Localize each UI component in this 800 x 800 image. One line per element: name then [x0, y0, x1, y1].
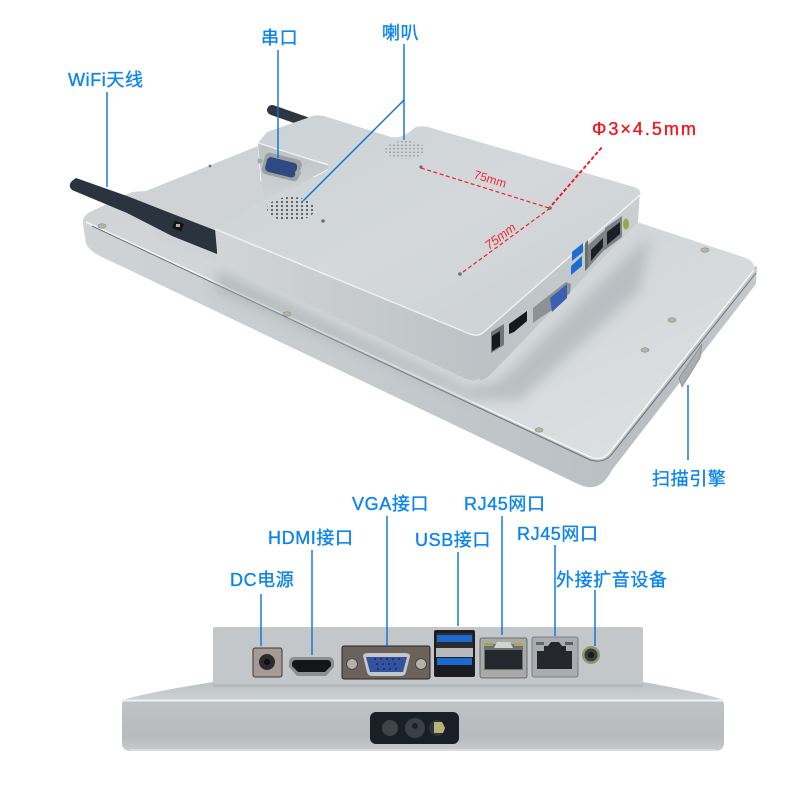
front edge [122, 699, 724, 751]
label: hole spec: Φ3×4.5mm [592, 119, 698, 139]
label: RJ45 port 1: RJ45网口 [464, 494, 546, 514]
back enclosure lower level [131, 146, 262, 262]
shadow under enclosure [215, 235, 650, 400]
speaker grille lower [267, 197, 315, 221]
screws on plate [98, 224, 709, 432]
side ports [491, 216, 629, 353]
DC jack [253, 648, 282, 677]
speaker grille upper [385, 141, 425, 159]
label: USB: USB接口 [415, 530, 491, 550]
75mm dimension lines: 75mm [482, 220, 519, 252]
VGA port [342, 646, 430, 679]
enclosure right face [477, 192, 640, 380]
device: port view [122, 627, 724, 751]
75mm dimension lines [421, 146, 603, 272]
scanner window [370, 712, 459, 744]
HDMI port [289, 657, 334, 676]
base plate [83, 170, 757, 487]
rear antenna [272, 110, 312, 124]
label: serial port: 串口 [261, 28, 298, 48]
enclosure left face [215, 229, 480, 380]
label: scan engine: 扫描引擎 [652, 469, 726, 489]
callouts: top device [107, 44, 688, 460]
audio jack [582, 646, 600, 664]
enclosure top face [215, 115, 640, 335]
label: speaker: 喇叭 [382, 23, 419, 43]
RJ45 port 2 [532, 637, 578, 677]
rear plate slope [122, 682, 724, 700]
label: external audio: 外接扩音设备 [556, 570, 668, 590]
device: rear view [70, 115, 757, 487]
serial port recess [257, 143, 328, 200]
rear enclosure [213, 627, 643, 687]
USB ports [434, 630, 475, 677]
scan engine window [679, 344, 702, 387]
label: VGA: VGA接口 [352, 494, 429, 514]
mounting holes [209, 165, 552, 276]
front antenna [70, 178, 217, 254]
label: DC power: DC电源 [230, 570, 294, 590]
75mm dimension lines: 75mm [472, 167, 508, 191]
RJ45 port 1 [480, 638, 527, 678]
label: HDMI: HDMI接口 [268, 528, 354, 548]
label: RJ45 port 2: RJ45网口 [517, 524, 599, 544]
callouts: port view [261, 516, 595, 655]
label: WiFi antenna: WiFi天线 [68, 70, 144, 90]
